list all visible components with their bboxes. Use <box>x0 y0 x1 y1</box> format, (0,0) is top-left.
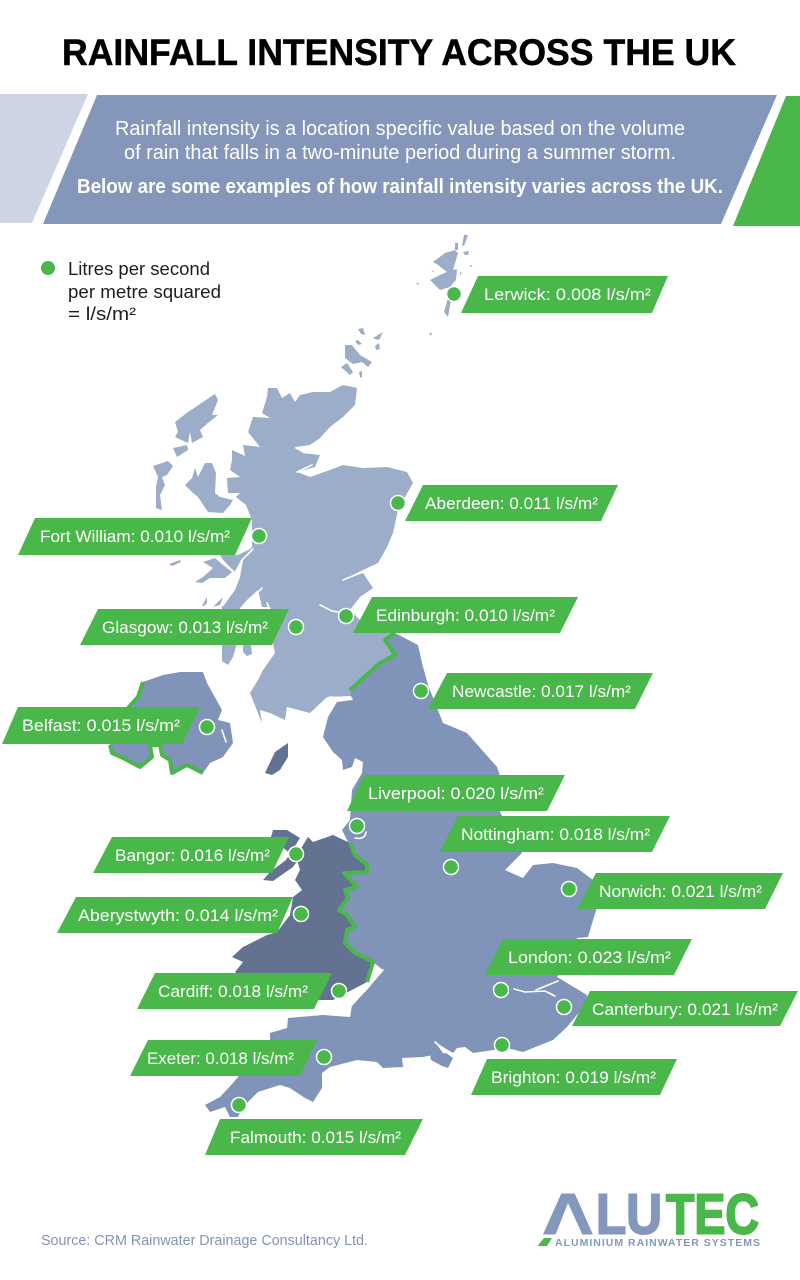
map: Harris <box>173 445 188 457</box>
map: Morvern <box>220 548 252 572</box>
label: Glasgow <box>80 609 289 645</box>
map: Knapdale <box>213 597 223 607</box>
label: Norwich: Norwich: 0.021 l/s/m² <box>599 882 762 901</box>
label: Glasgow: Glasgow: 0.013 l/s/m² <box>102 618 268 637</box>
map: Shetland <box>416 235 473 336</box>
map: Arran <box>243 645 252 656</box>
label: Brighton: Brighton: 0.019 l/s/m² <box>491 1068 656 1087</box>
map: Isle of Wight <box>430 1053 453 1068</box>
label: Norwich <box>577 873 783 909</box>
map: Scotland and islands <box>153 235 473 723</box>
map: Scotland-England border <box>350 633 395 690</box>
label: Lerwick: Lerwick: 0.008 l/s/m² <box>484 285 651 304</box>
intro text: Below are some examples of how rainfall intensity varies across the UK. <box>77 176 723 198</box>
map: Wales-England border <box>339 843 373 982</box>
logo: Alutec: A <box>543 1182 593 1246</box>
label: Nottingham <box>440 816 670 852</box>
map: Kintyre <box>222 606 240 665</box>
map: Northern Ireland <box>105 672 233 773</box>
legend: Litres per second <box>68 259 210 279</box>
label: Fort William: Fort William: 0.010 l/s/m² <box>40 527 230 546</box>
label: London <box>485 939 692 975</box>
label: Brighton <box>471 1059 677 1095</box>
legend <box>41 259 221 324</box>
label: Bangor <box>93 837 289 873</box>
map: Uist <box>153 461 173 510</box>
legend: per metre squared <box>68 282 221 302</box>
label: Exeter: Exeter: 0.018 l/s/m² <box>147 1049 294 1068</box>
legend: = l/s/m² <box>68 304 136 324</box>
label: Edinburgh <box>353 597 578 633</box>
map: Lewis <box>175 394 218 443</box>
label: Cardiff: Cardiff: 0.018 l/s/m² <box>158 982 308 1001</box>
label: Belfast <box>2 707 200 744</box>
title: RAINFALL INTENSITY ACROSS THE UK <box>62 31 736 73</box>
map: Wales <box>232 835 373 1000</box>
label: London: London: 0.023 l/s/m² <box>508 948 671 967</box>
label: Cardiff <box>137 973 332 1009</box>
intro text <box>77 118 723 198</box>
label: Aberystwyth <box>57 897 293 933</box>
label: Edinburgh: Edinburgh: 0.010 l/s/m² <box>376 606 555 625</box>
band: pale left slant <box>0 94 88 223</box>
map: England <box>205 633 597 1117</box>
map: Jura <box>202 597 207 606</box>
label: Aberdeen <box>405 485 618 521</box>
map: coastal inlets <box>222 448 558 1053</box>
map: Skye <box>185 463 233 513</box>
band: green right slant <box>733 96 800 226</box>
label: Canterbury <box>572 991 798 1026</box>
logo: Alutec: ALUMINIUM RAINWATER SYSTEMS <box>555 1237 760 1249</box>
map: Isle of Man <box>265 743 288 775</box>
intro text: of rain that falls in a two-minute period during a summer storm. <box>124 142 676 164</box>
label: Newcastle: Newcastle: 0.017 l/s/m² <box>452 682 631 701</box>
logo: Alutec: TEC <box>666 1182 759 1246</box>
logo: Alutec: LU <box>596 1182 662 1246</box>
map: Orkney <box>341 328 383 378</box>
label: Aberdeen: Aberdeen: 0.011 l/s/m² <box>425 494 598 513</box>
label: Lerwick <box>461 276 668 313</box>
map: Northern Ireland border <box>110 682 203 773</box>
label: Aberystwyth: Aberystwyth: 0.014 l/s/m² <box>78 906 278 925</box>
map: Anglesey and Llyn <box>262 830 300 881</box>
label: Falmouth <box>205 1119 423 1155</box>
map of the UK <box>105 235 597 1117</box>
label: Newcastle <box>428 673 653 709</box>
label: Fort William <box>18 518 252 555</box>
label: Liverpool: Liverpool: 0.020 l/s/m² <box>368 784 544 803</box>
logo: Alutec <box>538 1182 760 1249</box>
location markers <box>200 286 576 1112</box>
label: Liverpool <box>347 775 565 811</box>
map: Coll and Tiree <box>169 560 181 566</box>
label: Exeter <box>130 1040 317 1076</box>
map: Mull <box>195 558 232 583</box>
source note: Source: CRM Rainwater Drainage Consultancy Ltd. <box>41 1233 368 1249</box>
panel: intro <box>43 95 777 224</box>
label: Bangor: Bangor: 0.016 l/s/m² <box>115 846 270 865</box>
label: Belfast: Belfast: 0.015 l/s/m² <box>22 716 180 735</box>
label: Falmouth: Falmouth: 0.015 l/s/m² <box>230 1128 401 1147</box>
label: Canterbury: Canterbury: 0.021 l/s/m² <box>592 1000 778 1019</box>
labels <box>2 276 798 1155</box>
header band <box>0 94 800 226</box>
intro text: Rainfall intensity is a location specific value based on the volume <box>115 118 685 140</box>
label: Nottingham: Nottingham: 0.018 l/s/m² <box>461 825 650 844</box>
